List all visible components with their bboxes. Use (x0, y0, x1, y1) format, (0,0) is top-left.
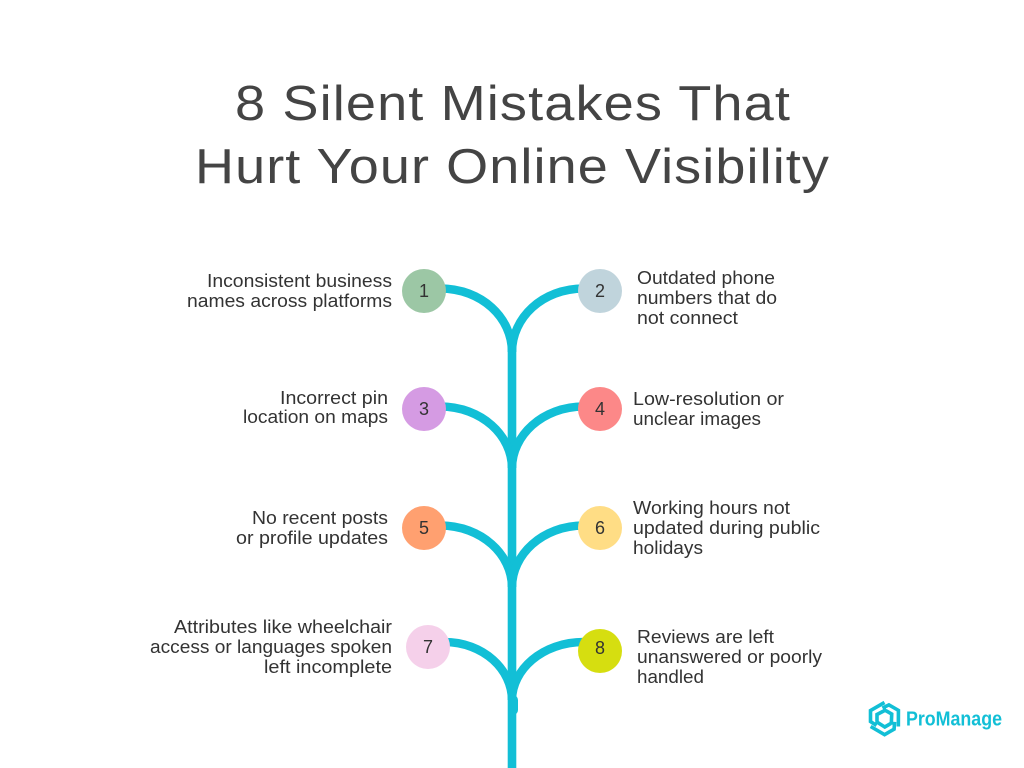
mistake 5 (236, 506, 446, 550)
mistake 7: access or languages spoken (150, 637, 392, 657)
mistake 1 (187, 269, 446, 313)
mistake 6: 6 (595, 518, 605, 538)
mistake 4: Low-resolution or (633, 389, 784, 409)
mistake 3: Incorrect pin (280, 388, 388, 408)
mistake 8: unanswered or poorly (637, 647, 822, 667)
mistake 8: Reviews are left (637, 627, 774, 647)
mistake 7: 7 (423, 637, 433, 657)
logo: ProManage: ProManage (906, 708, 1002, 730)
mistake 1: names across platforms (187, 291, 392, 311)
mistake 1: Inconsistent business (207, 271, 392, 291)
mistake 6: updated during public (633, 518, 820, 538)
mistake 3 (243, 387, 446, 431)
title: Hurt Your Online Visibility (195, 140, 830, 194)
mistake 4 (578, 387, 784, 431)
mistake 8 (578, 627, 822, 687)
mistake 5: No recent posts (252, 508, 388, 528)
mistake 2 (578, 268, 777, 328)
mistake 3: 3 (419, 399, 429, 419)
logo: ProManage (870, 702, 1002, 739)
title (195, 77, 830, 194)
timeline stem and branches (440, 288, 584, 768)
mistake 2: not connect (637, 308, 738, 328)
mistake 7: left incomplete (264, 657, 392, 677)
mistake 4: unclear images (633, 409, 761, 429)
mistake 7 (150, 617, 450, 677)
mistake 2: numbers that do (637, 288, 777, 308)
mistake 1: 1 (419, 281, 429, 301)
mistake 3: location on maps (243, 407, 388, 427)
title: 8 Silent Mistakes That (235, 77, 791, 131)
mistake 2: Outdated phone (637, 268, 775, 288)
mistake 4: 4 (595, 399, 605, 419)
mistake 5: or profile updates (236, 528, 388, 548)
mistake 8: 8 (595, 638, 605, 658)
mistake 6: Working hours not (633, 498, 790, 518)
mistake 8: handled (637, 667, 704, 687)
mistake 2: 2 (595, 281, 605, 301)
mistake 6: holidays (633, 538, 703, 558)
mistake 7: Attributes like wheelchair (174, 617, 392, 637)
mistake 6 (578, 498, 820, 558)
mistake 5: 5 (419, 518, 429, 538)
